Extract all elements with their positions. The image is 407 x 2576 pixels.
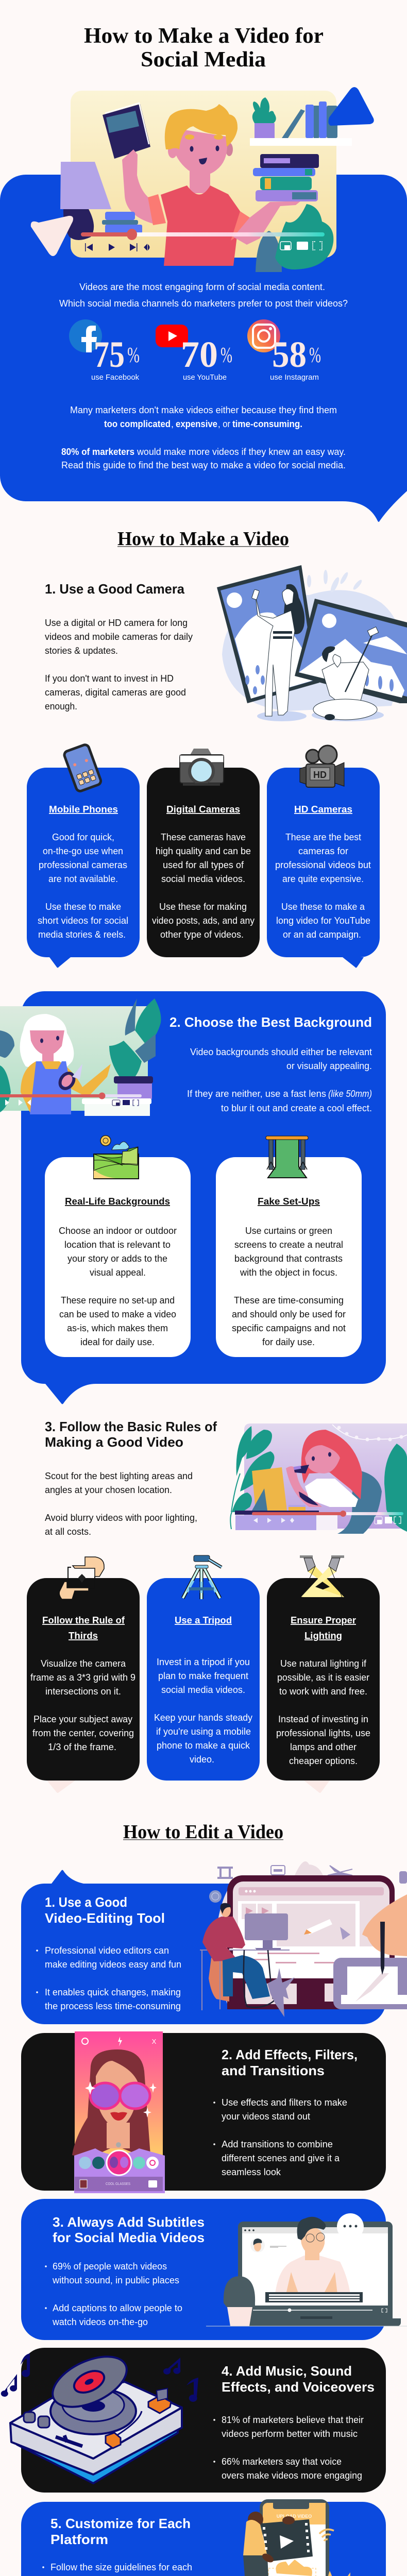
stat: Facebook 75%: %: [127, 344, 140, 367]
card: Rule of Thirds: Visualize the camera: [41, 1658, 126, 1669]
edit step 1 text: Professional video editors can: [45, 1945, 169, 1956]
card: Digital Cameras: Digital Cameras: [166, 804, 240, 815]
card: Fake Set-Ups: and should only be used for: [232, 1309, 346, 1319]
step 2 text: or visually appealing.: [286, 1061, 372, 1071]
stat: YouTube 70%: [156, 325, 232, 382]
card: Fake Set-Ups: Fake Set-Ups: [258, 1196, 320, 1207]
title: [84, 24, 324, 72]
icon: camera: [180, 749, 224, 786]
stat: Instagram 58%: 58: [272, 334, 307, 375]
panel: edit step 1: [21, 1870, 386, 2024]
edit step 3 text: watch videos on-the-go: [52, 2317, 148, 2327]
card: Use a Tripod: [147, 1555, 260, 1781]
card: Ensure Proper Lighting: Instead of investing in: [278, 1714, 368, 1724]
card: Rule of Thirds: [27, 1557, 140, 1781]
step 1 text: Use a digital or HD camera for long: [45, 618, 188, 628]
panel: step 2 background: [21, 991, 386, 1404]
edit step 3 text: for Social Media Videos: [53, 2230, 205, 2245]
card: HD Cameras: These are the best: [285, 832, 361, 842]
card: Mobile Phones: short videos for social: [38, 916, 128, 926]
edit step 5 text: [42, 2516, 193, 2576]
step 2 text: Video backgrounds should either be relevant: [190, 1047, 372, 1057]
step 3 text: at all costs.: [45, 1527, 91, 1537]
edit step 5 text: Platform: [50, 2532, 108, 2547]
panel: edit step 2: [21, 2033, 386, 2191]
card: Use a Tripod: Use a Tripod: [175, 1615, 232, 1625]
step 2 text: (like 50mm): [328, 1089, 372, 1099]
icon: phone: [63, 744, 102, 792]
card: Digital Cameras: video posts, ads, and any: [152, 916, 255, 926]
card: Fake Set-Ups: with the object in focus.: [240, 1267, 337, 1278]
card: Digital Cameras: These cameras have: [161, 832, 246, 842]
card: Digital Cameras: used for all types of: [163, 860, 244, 870]
card: Use a Tripod: video.: [190, 1754, 214, 1765]
card: Use a Tripod: plan to make frequent: [158, 1671, 248, 1681]
step 1 text: stories & updates.: [45, 646, 118, 656]
intro closing text: too complicated: [104, 419, 171, 429]
card: HD Cameras: long video for YouTube: [276, 916, 370, 926]
edit step 4 text: 66% marketers say that voice: [222, 2456, 342, 2467]
edit step 2 text: seamless look: [222, 2167, 281, 2177]
card: Digital Cameras: other type of videos.: [160, 929, 244, 940]
card: Rule of Thirds: Follow the Rule of: [42, 1615, 125, 1625]
intro closing text: expensive: [176, 419, 217, 429]
card: Digital Cameras: social media videos.: [161, 874, 245, 884]
title: Social Media: [141, 48, 266, 72]
card: Rule of Thirds: frame as a 3*3 grid with 9: [30, 1672, 135, 1683]
edit step 4 text: videos perform better with music: [222, 2429, 358, 2439]
stat: YouTube 70%: 70: [181, 334, 218, 375]
card: Real-Life Backgrounds: [45, 1136, 191, 1357]
card: Use a Tripod: social media videos.: [161, 1685, 245, 1695]
card: Mobile Phones: Use these to make: [45, 902, 121, 912]
card: HD Cameras: HD Cameras: [294, 804, 352, 815]
step 3 text: [45, 1419, 217, 1537]
card: Ensure Proper Lighting: to work with and free.: [279, 1686, 367, 1697]
title: How to Make a Video for: [84, 24, 324, 48]
edit step 4 text: 4. Add Music, Sound: [222, 2363, 352, 2379]
edit step 1 text: Video-Editing Tool: [45, 1910, 165, 1926]
card: HD Cameras: cameras for: [298, 846, 348, 856]
card: Fake Set-Ups: [216, 1136, 362, 1357]
edit step 1 text: [36, 1894, 181, 2011]
card: Mobile Phones: on-the-go use when: [43, 846, 123, 856]
intro closing text: [61, 405, 346, 470]
card: Use a Tripod: phone to make a quick: [157, 1740, 250, 1751]
step 1 text: videos and mobile cameras for daily: [45, 632, 193, 642]
card: Digital Cameras: Use these for making: [159, 902, 247, 912]
card: Ensure Proper Lighting: Ensure Proper: [291, 1615, 356, 1625]
icon: landscape: [94, 1136, 139, 1179]
intro closing text: Read this guide to find the best way to make a video for social media.: [61, 460, 346, 470]
card: Mobile Phones: are not available.: [48, 874, 118, 884]
icon: green screen: [266, 1136, 308, 1178]
stat: Facebook 75%: use Facebook: [91, 373, 139, 382]
edit step 1 text: 1. Use a Good: [45, 1894, 127, 1910]
heading: How to Edit a Video: How to Edit a Video: [123, 1821, 283, 1843]
step 1 text: If you don't want to invest in HD: [45, 673, 174, 684]
intro closing text: , or: [218, 419, 230, 429]
card: Ensure Proper Lighting: [267, 1555, 380, 1781]
intro text: Videos are the most engaging form of social media content.: [79, 282, 325, 292]
illustration: selfie frames: [217, 565, 407, 721]
illustration: subtitled video on laptop: [206, 2213, 407, 2326]
edit step 1 text: It enables quick changes, making: [45, 1987, 181, 1997]
card: Use a Tripod: Invest in a tripod if you: [157, 1657, 250, 1667]
card: Mobile Phones: media stories & reels.: [38, 929, 126, 940]
intro closing text: 80% of marketers: [61, 447, 134, 457]
illustration: face filter phone: X: [152, 2038, 157, 2045]
illustration: uploading a video on phone: UPLOAD VIDEO: [277, 2514, 312, 2519]
intro closing text: would make more videos if they knew an easy way.: [137, 447, 346, 457]
panel: edit step 3: [21, 2199, 386, 2340]
card: Mobile Phones: professional cameras: [39, 860, 127, 870]
card: Rule of Thirds: intersections on it.: [45, 1686, 121, 1697]
edit step 4 text: 81% of marketers believe that their: [222, 2415, 364, 2425]
edit step 4 text: overs make videos more engaging: [222, 2470, 362, 2481]
step 1 text: [45, 581, 193, 711]
stat: Instagram 58%: %: [309, 344, 321, 367]
intro closing text: time-consuming.: [232, 419, 302, 429]
card: Rule of Thirds: from the center, covering: [32, 1728, 134, 1738]
step 2 text: If they are neither, use a fast lens: [187, 1089, 326, 1099]
stat: Instagram 58%: use Instagram: [270, 373, 319, 382]
intro text: [59, 282, 348, 309]
stat: YouTube 70%: use YouTube: [183, 373, 227, 382]
stat: YouTube 70%: %: [221, 344, 232, 367]
card: Rule of Thirds: 1/3 of the frame.: [48, 1742, 116, 1752]
edit step 3 text: without sound, in public places: [52, 2275, 179, 2285]
decorative tails: [47, 1781, 330, 1793]
edit step 1 text: the process less time-consuming: [45, 2001, 181, 2011]
step 3 text: 3. Follow the Basic Rules of: [45, 1419, 217, 1434]
card: Fake Set-Ups: specific campaigns and not: [232, 1323, 346, 1333]
card: Real-Life Backgrounds: your story or adds to the: [67, 1253, 167, 1264]
card: Real-Life Backgrounds: visual appeal.: [90, 1267, 146, 1278]
card: Real-Life Backgrounds: Choose an indoor or outdoor: [59, 1226, 177, 1236]
heading: How to Make a Video: How to Make a Video: [117, 528, 289, 550]
card: Mobile Phones: [27, 744, 140, 968]
step 1 text: cameras, digital cameras are good: [45, 687, 186, 698]
edit step 5 text: Follow the size guidelines for each: [50, 2562, 192, 2572]
card: Real-Life Backgrounds: as-is, which makes them: [67, 1323, 168, 1333]
edit step 3 text: 69% of people watch videos: [53, 2261, 167, 2272]
intro closing text: ,: [171, 419, 174, 429]
card: Use a Tripod: if you're using a mobile: [156, 1726, 251, 1737]
stat: Facebook 75%: 75: [94, 334, 125, 375]
step 3 text: Making a Good Video: [45, 1434, 183, 1450]
edit step 5 text: 5. Customize for Each: [50, 2516, 191, 2531]
card: Ensure Proper Lighting: possible, as it is easier: [277, 1672, 369, 1683]
card: Fake Set-Ups: Use curtains or green: [245, 1226, 332, 1236]
card: Digital Cameras: high quality and can be: [156, 846, 251, 856]
icon: HD video camera: [300, 745, 344, 787]
edit step 2 text: and Transitions: [222, 2063, 325, 2078]
card: Real-Life Backgrounds: These require no set-up and: [61, 1295, 175, 1306]
step 2 text: to blur it out and create a cool effect.: [221, 1103, 372, 1113]
step 3 text: Avoid blurry videos with poor lighting,: [45, 1513, 197, 1523]
card: Fake Set-Ups: screens to create a neutral: [234, 1240, 343, 1250]
step 3 text: Scout for the best lighting areas and: [45, 1471, 193, 1481]
icon: crossed spotlights: [300, 1555, 344, 1599]
illustration: woman applying makeup video: [230, 1423, 407, 1534]
card: Ensure Proper Lighting: professional lights, use: [276, 1728, 370, 1738]
card: Fake Set-Ups: for daily use.: [262, 1337, 315, 1347]
card: Real-Life Backgrounds: ideal for daily use.: [80, 1337, 155, 1347]
illustration: video editor at desk: [200, 1861, 407, 2017]
illustration: uploading a video on phone: [221, 2499, 350, 2576]
edit step 2 text: Use effects and filters to make: [222, 2097, 347, 2108]
card: Ensure Proper Lighting: Use natural lighting if: [280, 1658, 367, 1669]
icon: tripod: [183, 1555, 222, 1599]
panel: intro: [0, 175, 407, 522]
card: Mobile Phones: Mobile Phones: [49, 804, 118, 815]
stat: Facebook 75%: [69, 319, 140, 382]
card: HD Cameras: or an ad campaign.: [283, 929, 361, 940]
card: HD Cameras: Use these to make a: [281, 902, 365, 912]
intro text: Which social media channels do marketers prefer to post their videos?: [59, 298, 348, 309]
illustration: boy holding books in video player: [31, 88, 374, 272]
card: Real-Life Backgrounds: location that is relevant to: [64, 1240, 171, 1250]
step 2 text: [169, 1014, 372, 1113]
illustration: gardener woman video: [0, 998, 161, 1116]
card: Rule of Thirds: Thirds: [69, 1631, 98, 1641]
intro closing text: Many marketers don't make videos either because they find them: [70, 405, 337, 415]
edit step 2 text: your videos stand out: [222, 2111, 310, 2122]
edit step 3 text: [45, 2214, 205, 2327]
edit step 2 text: 2. Add Effects, Filters,: [222, 2047, 358, 2062]
card: HD Cameras: professional videos but: [275, 860, 371, 870]
edit step 2 text: Add transitions to combine: [222, 2139, 333, 2149]
card: Ensure Proper Lighting: lamps and other: [290, 1742, 357, 1752]
edit step 3 text: 3. Always Add Subtitles: [53, 2214, 205, 2230]
edit step 1 text: make editing videos easy and fun: [45, 1959, 181, 1970]
panel: edit step 4: [21, 2348, 386, 2493]
card: Ensure Proper Lighting: Lighting: [304, 1631, 342, 1641]
icon: framing hands: [59, 1557, 104, 1599]
card: Fake Set-Ups: background that contrasts: [234, 1253, 343, 1264]
edit step 4 text: Effects, and Voiceovers: [222, 2379, 375, 2395]
step 1 text: enough.: [45, 701, 77, 711]
card: Digital Cameras: [147, 749, 260, 957]
panel: edit step 5: [21, 2502, 386, 2576]
card: Use a Tripod: Keep your hands steady: [154, 1713, 252, 1723]
step 1 text: 1. Use a Good Camera: [45, 581, 185, 597]
edit step 4 text: [213, 2363, 375, 2481]
step 2 text: 2. Choose the Best Background: [169, 1014, 372, 1030]
stat: Instagram 58%: [247, 319, 321, 382]
illustration: face filter phone: COOL GLASSES: [106, 2182, 130, 2186]
card: HD Cameras: are quite expensive.: [282, 874, 364, 884]
illustration: turntable: [1, 2346, 198, 2483]
icon: HD video camera: HD: [313, 770, 327, 780]
card: Rule of Thirds: Place your subject away: [33, 1714, 132, 1724]
edit step 2 text: different scenes and give it a: [222, 2153, 340, 2163]
card: Mobile Phones: Good for quick,: [52, 832, 114, 842]
card: Fake Set-Ups: These are time-consuming: [234, 1295, 344, 1306]
edit step 2 text: [213, 2047, 358, 2177]
card: Ensure Proper Lighting: cheaper options.: [289, 1756, 358, 1766]
illustration: face filter phone: [72, 2031, 165, 2193]
edit step 3 text: Add captions to allow people to: [53, 2303, 182, 2313]
card: HD Cameras: [267, 745, 380, 968]
step 3 text: angles at your chosen location.: [45, 1485, 172, 1495]
card: Real-Life Backgrounds: can be used to make a video: [59, 1309, 176, 1319]
card: Real-Life Backgrounds: Real-Life Backgrounds: [65, 1196, 170, 1207]
